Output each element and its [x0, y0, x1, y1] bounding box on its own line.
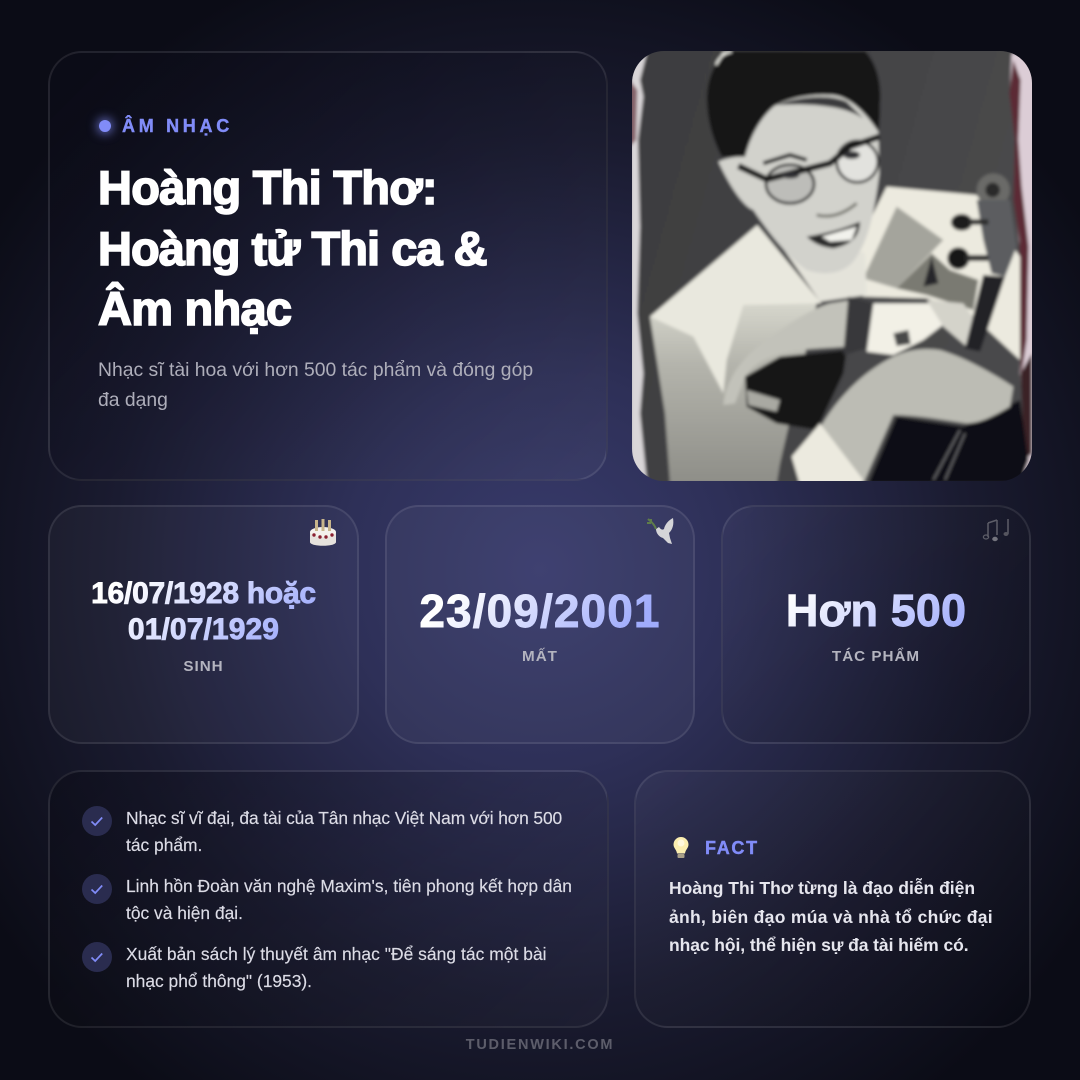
- point 3: Xuất bản sách lý thuyết âm nhạc "Để sáng tác một bài: [126, 944, 547, 964]
- footer: TUDIENWIKI.COM: [466, 1037, 614, 1053]
- icon: dove: [647, 518, 674, 544]
- point 1: tác phẩm.: [126, 835, 202, 855]
- birth label: SINH: [183, 658, 224, 675]
- stat card: death: [385, 505, 695, 744]
- title: Hoàng tử Thi ca &: [98, 222, 487, 274]
- point 3: nhạc phổ thông" (1953).: [126, 971, 312, 991]
- panel: key points: [48, 770, 609, 1028]
- point 1: [126, 808, 562, 855]
- fact text: nhạc hội, thể hiện sự đa tài hiếm có.: [669, 935, 968, 955]
- check icon 2: [82, 874, 112, 904]
- title: Hoàng Thi Thơ:: [98, 161, 437, 214]
- fact label: FACT: [705, 838, 759, 858]
- panel: hero: [48, 51, 608, 481]
- title: [98, 161, 487, 335]
- works value: Hơn 500: [786, 585, 966, 636]
- panel: fact: [634, 770, 1031, 1028]
- icon: light bulb: [674, 837, 688, 858]
- death label: MẤT: [522, 648, 558, 665]
- icon: cake: [310, 519, 336, 546]
- stat card: birth: [48, 505, 359, 744]
- point 1: Nhạc sĩ vĩ đại, đa tài của Tân nhạc Việt Nam với hơn 500: [126, 808, 562, 828]
- stat card: works: [721, 505, 1031, 744]
- fact text: ảnh, biên đạo múa và nhà tổ chức đại: [669, 907, 993, 927]
- fact text: Hoàng Thi Thơ từng là đạo diễn điện: [669, 878, 975, 898]
- death value: 23/09/2001: [419, 585, 661, 637]
- point 2: Linh hồn Đoàn văn nghệ Maxim's, tiên phong kết hợp dân: [126, 876, 572, 896]
- check icon 3: [82, 942, 112, 972]
- fact text: [669, 878, 993, 955]
- works label: TÁC PHẨM: [832, 648, 920, 665]
- point 3: [126, 944, 547, 991]
- works value: [723, 586, 1029, 636]
- subtitle: Nhạc sĩ tài hoa với hơn 500 tác phẩm và đóng góp: [98, 359, 533, 381]
- title: Âm nhạc: [98, 282, 291, 335]
- category label: ÂM NHẠC: [122, 116, 233, 136]
- category dot: [99, 120, 111, 132]
- check icon 1: [82, 806, 112, 836]
- point 2: tộc và hiện đại.: [126, 903, 243, 923]
- point 2: [126, 876, 572, 923]
- birth value: [50, 576, 357, 648]
- portrait photo: [632, 51, 1032, 481]
- subtitle: [98, 359, 533, 411]
- icon: music notes: [982, 519, 1009, 542]
- subtitle: đa dạng: [98, 389, 168, 411]
